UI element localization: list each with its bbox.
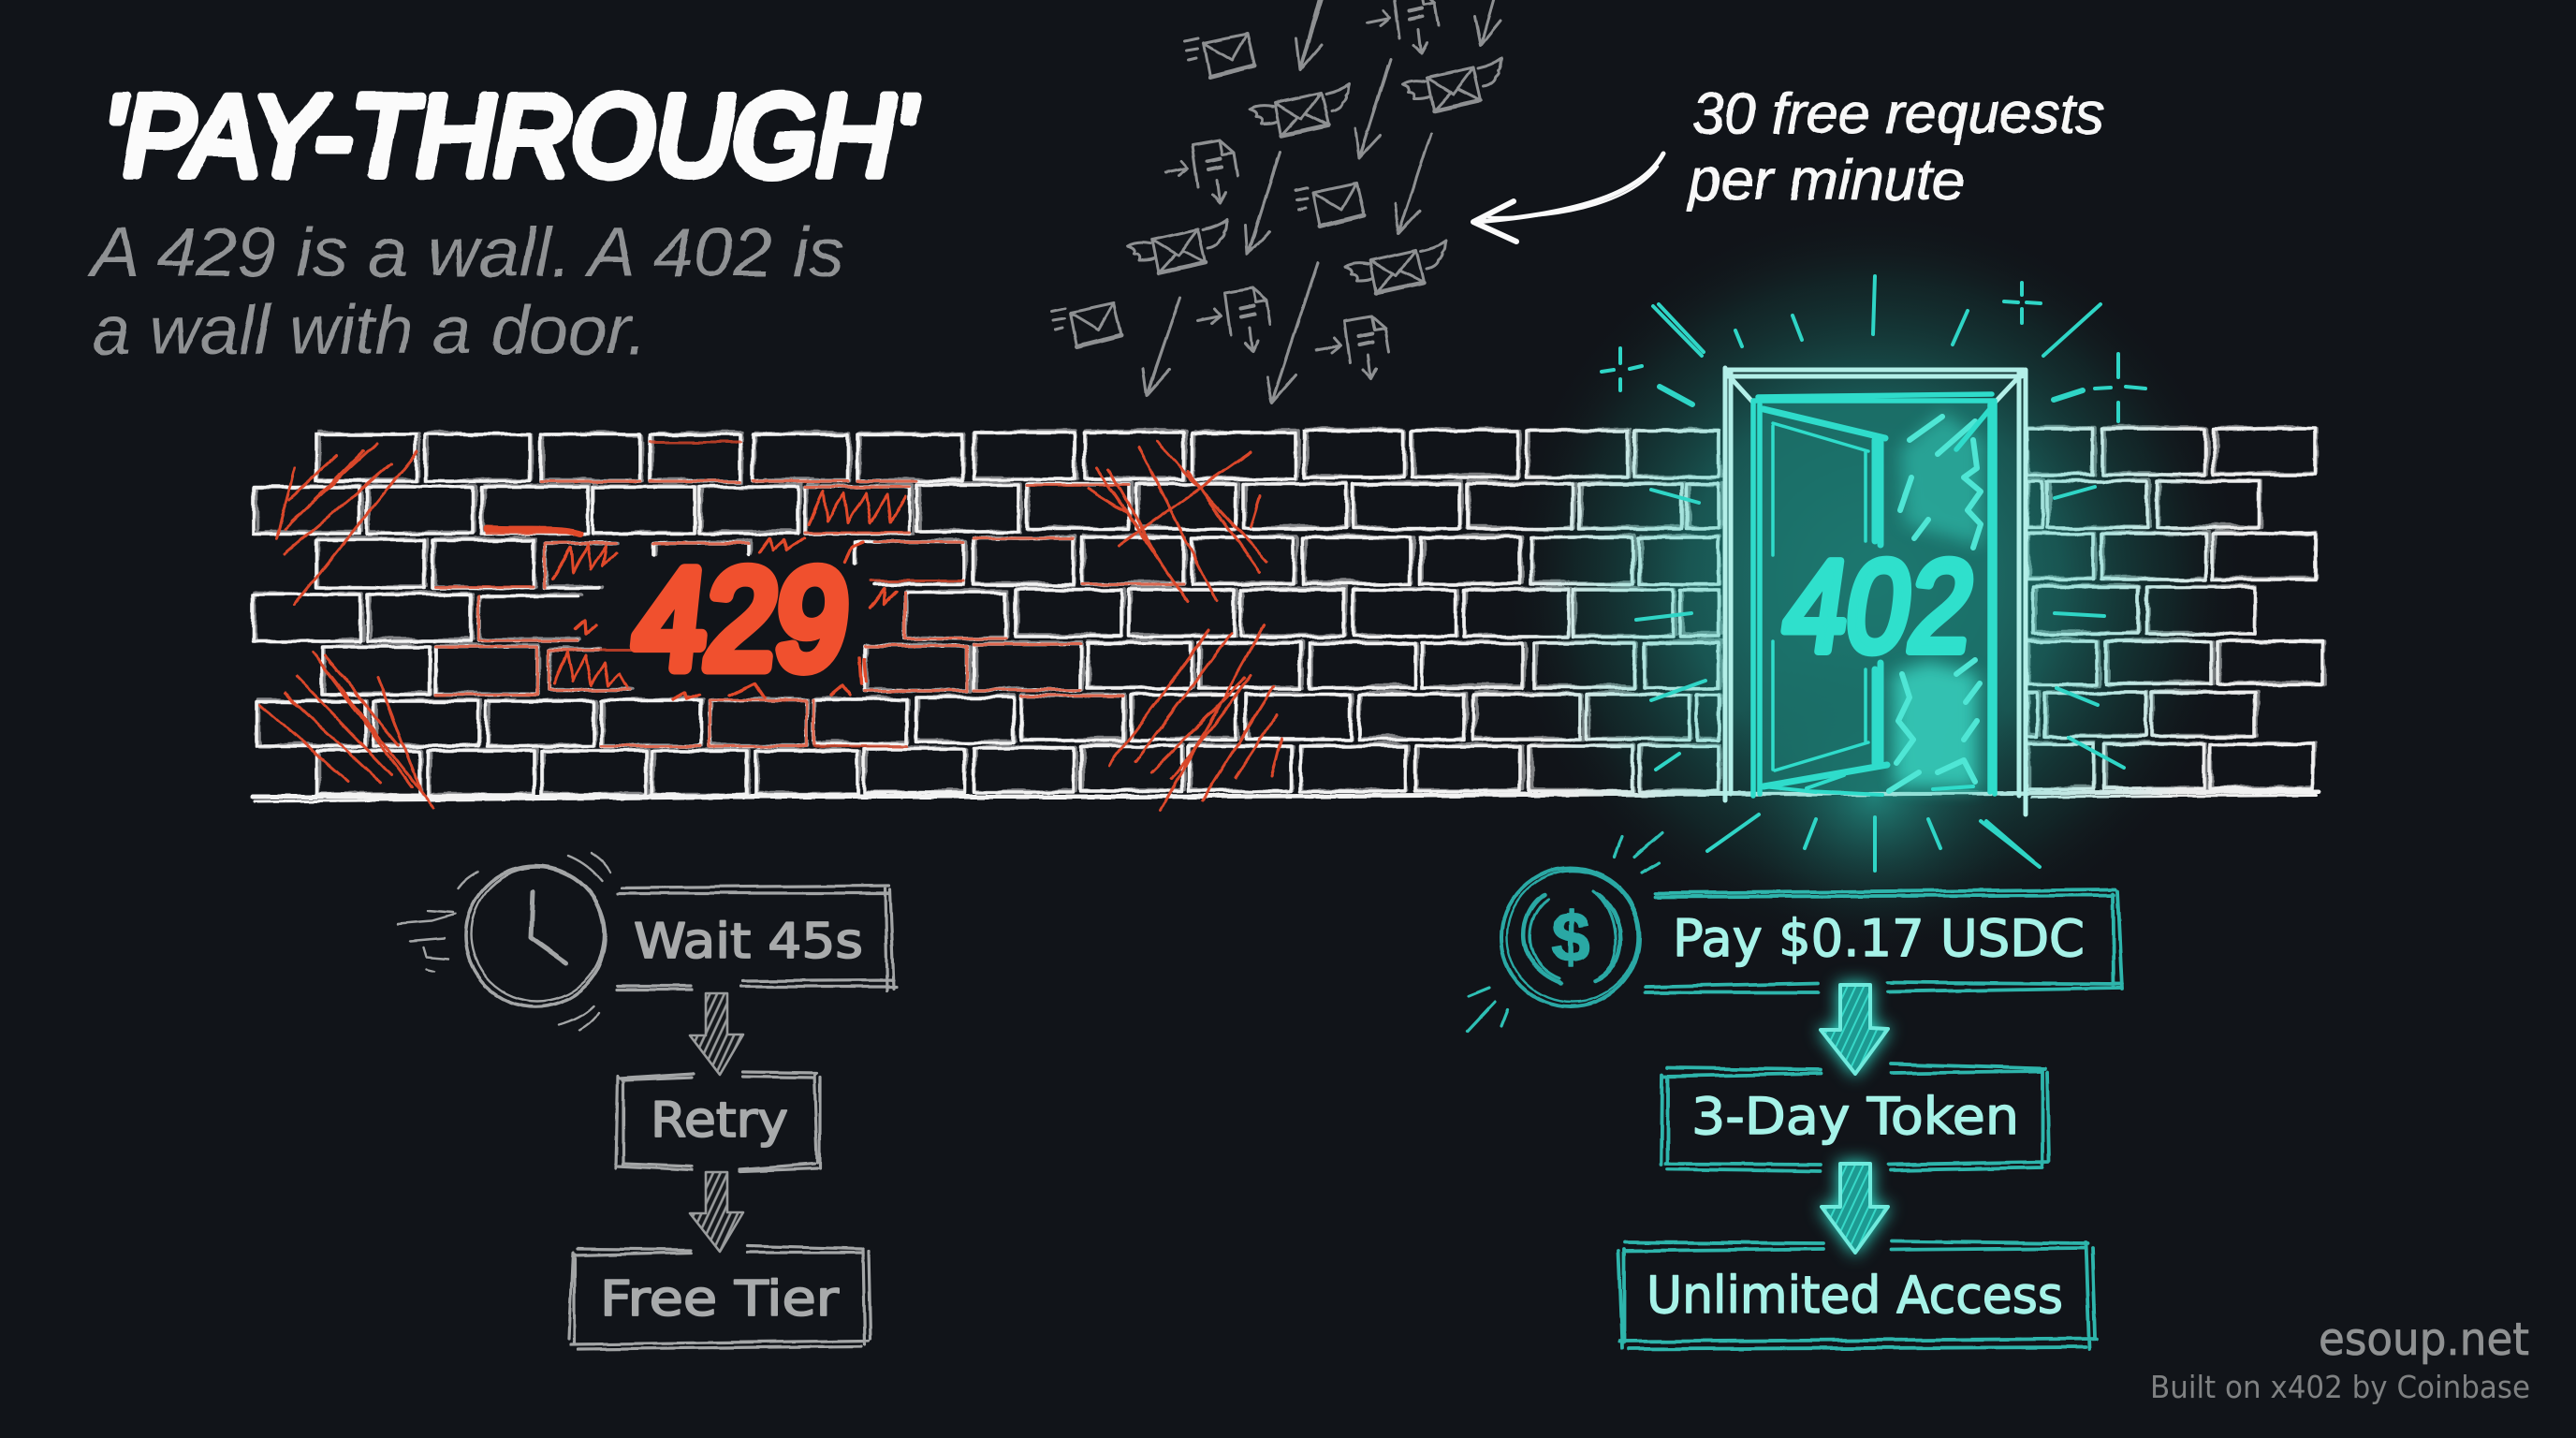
icon: document bbox=[1198, 288, 1270, 351]
doorway brush strokes bbox=[1889, 417, 1981, 791]
dollar sign: $ bbox=[1551, 899, 1590, 976]
red brush marks and fragments around 429 bbox=[487, 492, 906, 699]
arrow: annotation to request stream bbox=[1473, 154, 1663, 242]
box: Unlimited Access: Unlimited Access bbox=[1647, 1266, 2063, 1325]
arrow: token to unlimited bbox=[1822, 1164, 1888, 1253]
box: 3-Day Token: 3-Day Token bbox=[1691, 1087, 2019, 1146]
label: 402: 402 bbox=[1776, 535, 1983, 679]
icon: clock bbox=[398, 853, 610, 1031]
footer: esoup.net: esoup.net bbox=[2319, 1313, 2529, 1366]
box: Retry: Retry bbox=[651, 1093, 788, 1149]
door outer frame bbox=[1725, 368, 2026, 814]
icon: envelope bbox=[1185, 34, 1254, 77]
brick row 5 bbox=[322, 641, 2322, 695]
red brick edges bbox=[435, 442, 1183, 746]
falling requests: envelopes, documents and arrows bbox=[1052, 0, 1502, 403]
footer: built on x402: Built on x402 by Coinbase bbox=[2150, 1369, 2530, 1405]
brick row 1 bbox=[316, 429, 2315, 481]
flow: pay path bbox=[1618, 889, 2122, 1349]
label: 429: 429 bbox=[628, 540, 856, 697]
door glow bbox=[1500, 206, 2248, 955]
arrow: retry to free tier bbox=[690, 1172, 743, 1252]
flow: wait path bbox=[569, 886, 897, 1349]
icon: document bbox=[1367, 0, 1439, 53]
door opening fill bbox=[1753, 401, 1995, 792]
clock motion marks bbox=[398, 853, 610, 1031]
brick row 6 bbox=[256, 693, 2255, 746]
brick row 7 bbox=[316, 744, 2313, 795]
door inner frame bbox=[1753, 394, 1995, 796]
icon: winged envelope bbox=[1250, 83, 1350, 136]
box: Free Tier: Free Tier bbox=[600, 1271, 840, 1328]
brick wall bbox=[253, 429, 2322, 795]
subtitle: a wall with a door. bbox=[92, 291, 647, 369]
box: 3-Day Token bbox=[1661, 1064, 2049, 1171]
brick row 3 bbox=[316, 534, 2315, 588]
arrow stream bbox=[1143, 0, 1500, 403]
door rays and sparkles bbox=[1602, 276, 2145, 871]
box: Retry bbox=[616, 1072, 820, 1171]
brick row 4 bbox=[253, 587, 2255, 641]
icon: winged envelope bbox=[1402, 58, 1502, 110]
wall base line bbox=[253, 791, 2320, 801]
subtitle bbox=[88, 213, 844, 369]
box: Free Tier bbox=[569, 1246, 871, 1349]
subtitle: A 429 is a wall. A 402 is bbox=[88, 213, 844, 291]
annotation: 30 free requests per minute: per minute bbox=[1687, 148, 1965, 212]
annotation: 30 free requests per minute bbox=[1687, 81, 2104, 212]
icon: USDC coin bbox=[1468, 833, 1662, 1031]
box: Pay $0.17 USDC: Pay $0.17 USDC bbox=[1673, 909, 2085, 968]
arrow: wait to retry bbox=[690, 993, 743, 1075]
red scratches: upper centre bbox=[1088, 442, 1267, 602]
box: Wait 45s: Wait 45s bbox=[634, 914, 863, 970]
icon: envelope bbox=[1295, 183, 1364, 227]
light through doorway bbox=[1893, 412, 1983, 788]
arrow: pay to token bbox=[1821, 985, 1888, 1074]
box: Pay $0.17 USDC bbox=[1646, 889, 2122, 992]
open door leaf bbox=[1764, 409, 1973, 795]
coin rays bbox=[1468, 833, 1662, 1031]
icon: document bbox=[1317, 316, 1389, 379]
red scratches: lower centre bbox=[1109, 625, 1281, 812]
red scratches: lower left bbox=[260, 653, 434, 808]
icon: envelope bbox=[1052, 303, 1121, 346]
icon: winged envelope bbox=[1127, 220, 1227, 272]
box: Wait 45s bbox=[617, 886, 897, 990]
annotation: 30 free requests per minute: 30 free requests bbox=[1692, 81, 2104, 145]
red scratches: upper left bbox=[276, 443, 417, 606]
icon: winged envelope bbox=[1345, 241, 1445, 293]
title: 'PAY-THROUGH' bbox=[103, 72, 917, 199]
brick row 2 bbox=[254, 481, 2259, 534]
red damage on bricks around 429 bbox=[435, 442, 1183, 746]
icon: document bbox=[1165, 140, 1237, 203]
box: Unlimited Access bbox=[1618, 1241, 2097, 1349]
door bbox=[1725, 368, 2026, 814]
